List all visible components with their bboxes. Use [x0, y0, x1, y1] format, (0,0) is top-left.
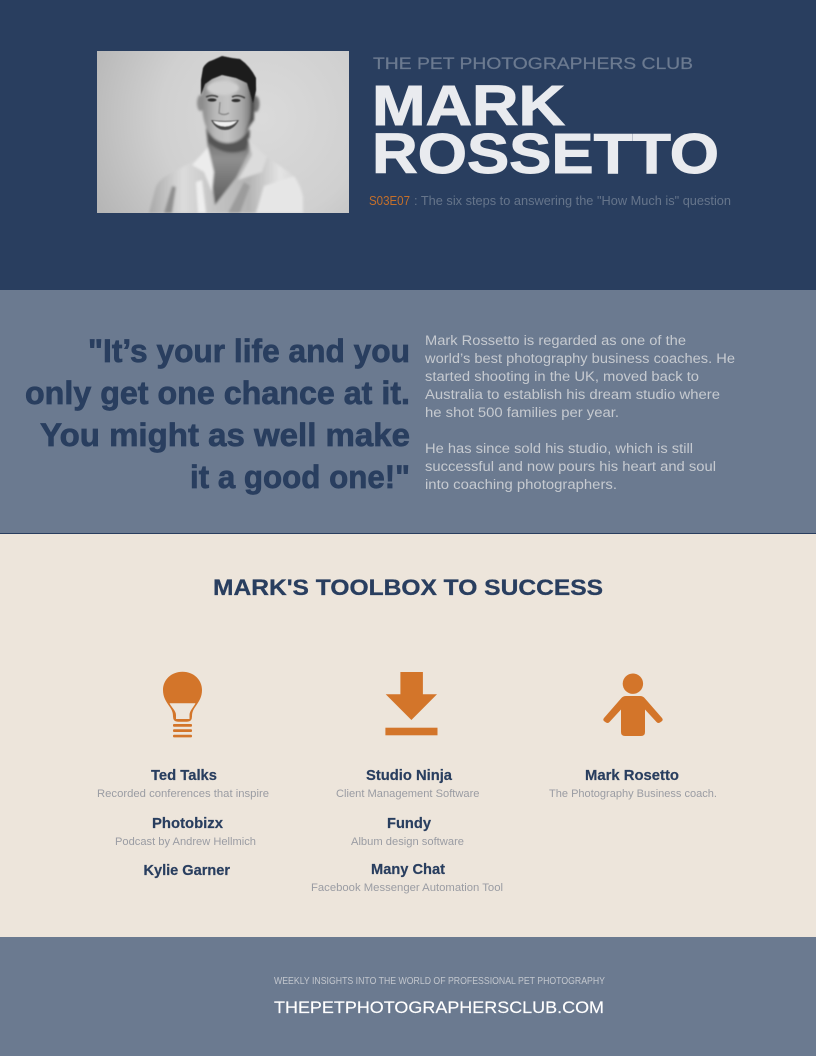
tool: Mark Rosetto: Mark Rosetto	[585, 767, 679, 784]
pull quote: You might as well make	[40, 417, 410, 453]
tool: Ted Talks: Recorded conferences that inspire	[97, 788, 269, 800]
panel: quote and biography	[0, 290, 816, 534]
panel: footer	[0, 937, 816, 1056]
title: last name: ROSSETTO	[372, 122, 719, 186]
tool: Many Chat	[311, 861, 503, 894]
pull quote	[25, 333, 410, 495]
tool: Studio Ninja: Studio Ninja	[366, 767, 453, 784]
panel: toolbox	[0, 534, 816, 937]
tool: Ted Talks: Ted Talks	[151, 767, 217, 784]
episode title: : The six steps to answering the "How Much is" question	[414, 194, 731, 208]
tool: Photobizx	[115, 815, 256, 848]
tool: Fundy: Album design software	[351, 836, 464, 848]
tool: Photobizx: Photobizx	[152, 815, 224, 832]
photo: portrait of Mark Rossetto	[97, 51, 349, 213]
biography text: successful and now pours his heart and soul	[425, 459, 716, 474]
footer website: THEPETPHOTOGRAPHERSCLUB.COM	[274, 998, 604, 1017]
tool: Mark Rosetto: The Photography Business coach.	[549, 788, 717, 800]
tool: Fundy	[351, 815, 464, 848]
biography text: He has since sold his studio, which is still	[425, 441, 693, 456]
pull quote: only get one chance at it.	[25, 375, 410, 411]
biography text: started shooting in the UK, moved back to	[425, 369, 699, 384]
toolbox heading: MARK'S TOOLBOX TO SUCCESS	[213, 575, 603, 600]
tool: Fundy: Fundy	[387, 815, 432, 832]
tool: Photobizx: Podcast by Andrew Hellmich	[115, 836, 256, 848]
icon: light bulb	[163, 672, 202, 737]
biography text: into coaching photographers.	[425, 477, 617, 492]
title: first name: MARK	[372, 74, 565, 138]
tool: Ted Talks	[97, 767, 269, 800]
biography text: Mark Rossetto is regarded as one of the	[425, 333, 686, 348]
icon: person	[603, 674, 663, 736]
pull quote: it a good one!"	[190, 459, 410, 495]
biography text: Australia to establish his dream studio where	[425, 387, 720, 402]
biography text	[424, 333, 735, 492]
tool: Many Chat: Many Chat	[371, 861, 445, 878]
tool: Mark Rosetto	[549, 767, 717, 800]
tool: Studio Ninja	[336, 767, 480, 800]
club name: THE PET PHOTOGRAPHERS CLUB	[373, 54, 693, 73]
biography text: he shot 500 families per year.	[425, 405, 619, 420]
biography text: world’s best photography business coaches. He	[424, 351, 735, 366]
pull quote: "It’s your life and you	[88, 333, 410, 369]
tool: Studio Ninja: Client Management Software	[336, 788, 480, 800]
tool: Kylie Garner: Kylie Garner	[144, 862, 230, 879]
icon: download arrow	[385, 672, 438, 735]
tool: Many Chat: Facebook Messenger Automation Tool	[311, 882, 503, 894]
footer tagline: WEEKLY INSIGHTS INTO THE WORLD OF PROFESSIONAL PET PHOTOGRAPHY	[274, 976, 605, 987]
panel: header	[0, 0, 816, 290]
episode code: S03E07	[369, 194, 410, 208]
